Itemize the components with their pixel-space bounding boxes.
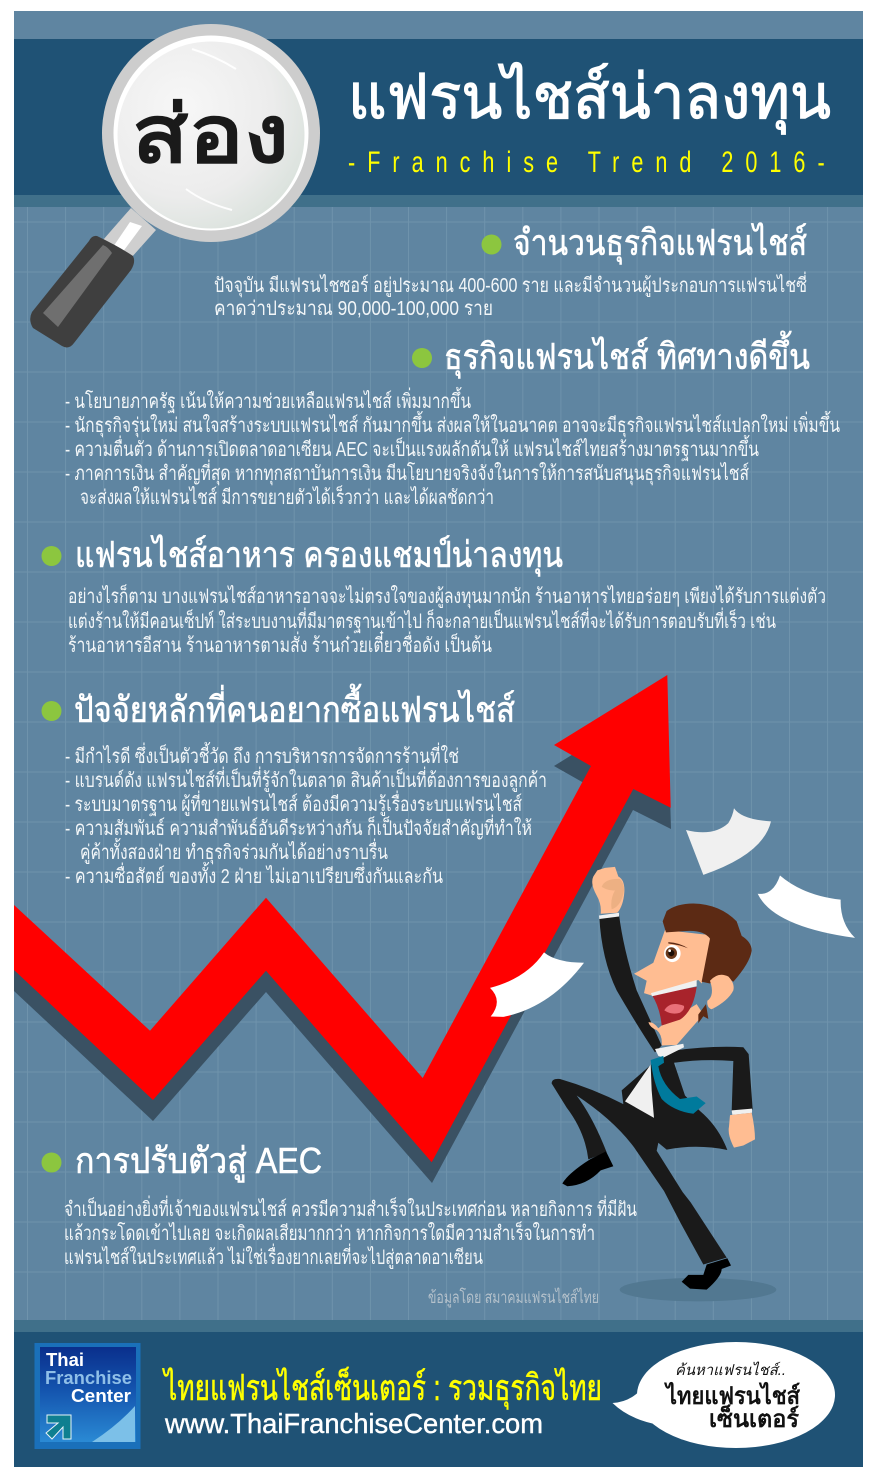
section: franchise outlook bbox=[65, 330, 840, 509]
logo: Thai Franchise Center: Thai bbox=[46, 1350, 84, 1370]
speech bubble: เซ็นเตอร์ bbox=[709, 1404, 799, 1433]
speech bubble bbox=[612, 1342, 835, 1448]
section: adapting to AEC: แฟรนไชส์ในประเทศแล้ว ไม่ใช่เรื่องยากเลยที่จะไปสู่ตลาดอาเซียน bbox=[64, 1243, 483, 1270]
logo: Thai Franchise Center: Franchise bbox=[45, 1368, 132, 1388]
section: key factors bbox=[42, 683, 547, 888]
footer band bbox=[14, 1320, 863, 1467]
footer url: www.ThaiFranchiseCenter.com bbox=[164, 1408, 543, 1439]
section: food franchise: ร้านอาหารอีสาน ร้านอาหารตามสั่ง ร้านก๋วยเตี๋ยวชื่อดัง เป็นต้น bbox=[68, 630, 492, 657]
icon: magnifying glass bbox=[30, 24, 320, 347]
section: franchise outlook: จะส่งผลให้แฟรนไชส์ มีการขยายตัวได้เร็วกว่า และได้ผลชัดกว่า bbox=[80, 484, 494, 509]
source credit: ข้อมูลโดย สมาคมแฟรนไชส์ไทย bbox=[428, 1287, 599, 1308]
section: adapting to AEC bbox=[42, 1140, 637, 1270]
section: key factors: ปัจจัยหลักที่คนอยากซื้อแฟรนไชส์ bbox=[74, 683, 515, 730]
section: key factors: - ระบบมาตรฐาน ผู้ที่ขายแฟรนไชส์ ต้องมีความรู้เรื่องระบบแฟรนไชส์ bbox=[65, 790, 522, 817]
section: food franchise bbox=[42, 534, 826, 657]
illustration: jumping businessman with papers bbox=[490, 808, 855, 1301]
section: franchise numbers: คาดว่าประมาณ 90,000-100,000 ราย bbox=[214, 298, 493, 320]
section: key factors: - มีกำไรดี ซึ่งเป็นตัวชี้วัด ถึง การบริหารการจัดการร้านที่ใช่ bbox=[65, 742, 459, 768]
section: key factors: - ความซื่อสัตย์ ของทั้ง 2 ฝ่าย ไม่เอาเปรียบซึ่งกันและกัน bbox=[65, 862, 443, 888]
section: adapting to AEC: จำเป็นอย่างยิ่งที่เจ้าของแฟรนไชส์ ควรมีความสำเร็จในประเทศก่อน หลายกิจการ ที่มีฝัน bbox=[64, 1195, 637, 1221]
subtitle: -Franchise Trend 2016- bbox=[348, 144, 825, 179]
section: franchise numbers: จำนวนธุรกิจแฟรนไชส์ bbox=[513, 222, 807, 265]
header band bbox=[14, 39, 863, 207]
chart arrow: shadow and red zigzag bbox=[14, 675, 671, 1183]
speech bubble: ไทยแฟรนไชส์ bbox=[663, 1381, 800, 1410]
speech bubble: ค้นหาแฟรนไชส์.. bbox=[675, 1361, 786, 1379]
logo: Thai Franchise Center bbox=[34, 1343, 140, 1449]
section: key factors: - ความสัมพันธ์ ความสำพันธ์อันดีระหว่างกัน ก็เป็นปัจจัยสำคัญที่ทำให้ bbox=[65, 814, 532, 840]
title: แฟรนไชส์น่าลงทุน bbox=[348, 62, 831, 134]
section: franchise outlook: - นโยบายภาครัฐ เน้นให้ความช่วยเหลือแฟรนไชส์ เพิ่มมากขึ้น bbox=[65, 387, 471, 413]
section: food franchise: แฟรนไชส์อาหาร ครองแชมป์น่าลงทุน bbox=[75, 534, 563, 577]
section: adapting to AEC: แล้วกระโดดเข้าไปเลย จะเกิดผลเสียมากกว่า หากกิจการใดมีความสำเร็จในการทำ bbox=[64, 1220, 595, 1245]
section: key factors: - แบรนด์ดัง แฟรนไชส์ที่เป็นที่รู้จักในตลาด สินค้าเป็นที่ต้องการของลูกค้า bbox=[65, 766, 547, 793]
section: key factors: คู่ค้าทั้งสองฝ่าย ทำธุรกิจร่วมกันได้อย่างราบรื่น bbox=[80, 838, 388, 865]
logo: Thai Franchise Center: Center bbox=[71, 1386, 131, 1406]
magnifier word: ส่อง bbox=[132, 90, 289, 179]
section: adapting to AEC: การปรับตัวสู่ AEC bbox=[75, 1140, 322, 1183]
footer headline: ไทยแฟรนไชส์เซ็นเตอร์ : รวมธุรกิจไทย bbox=[162, 1365, 602, 1410]
section: franchise numbers bbox=[214, 222, 807, 320]
section: franchise outlook: ธุรกิจแฟรนไชส์ ทิศทางดีขึ้น bbox=[444, 330, 810, 379]
